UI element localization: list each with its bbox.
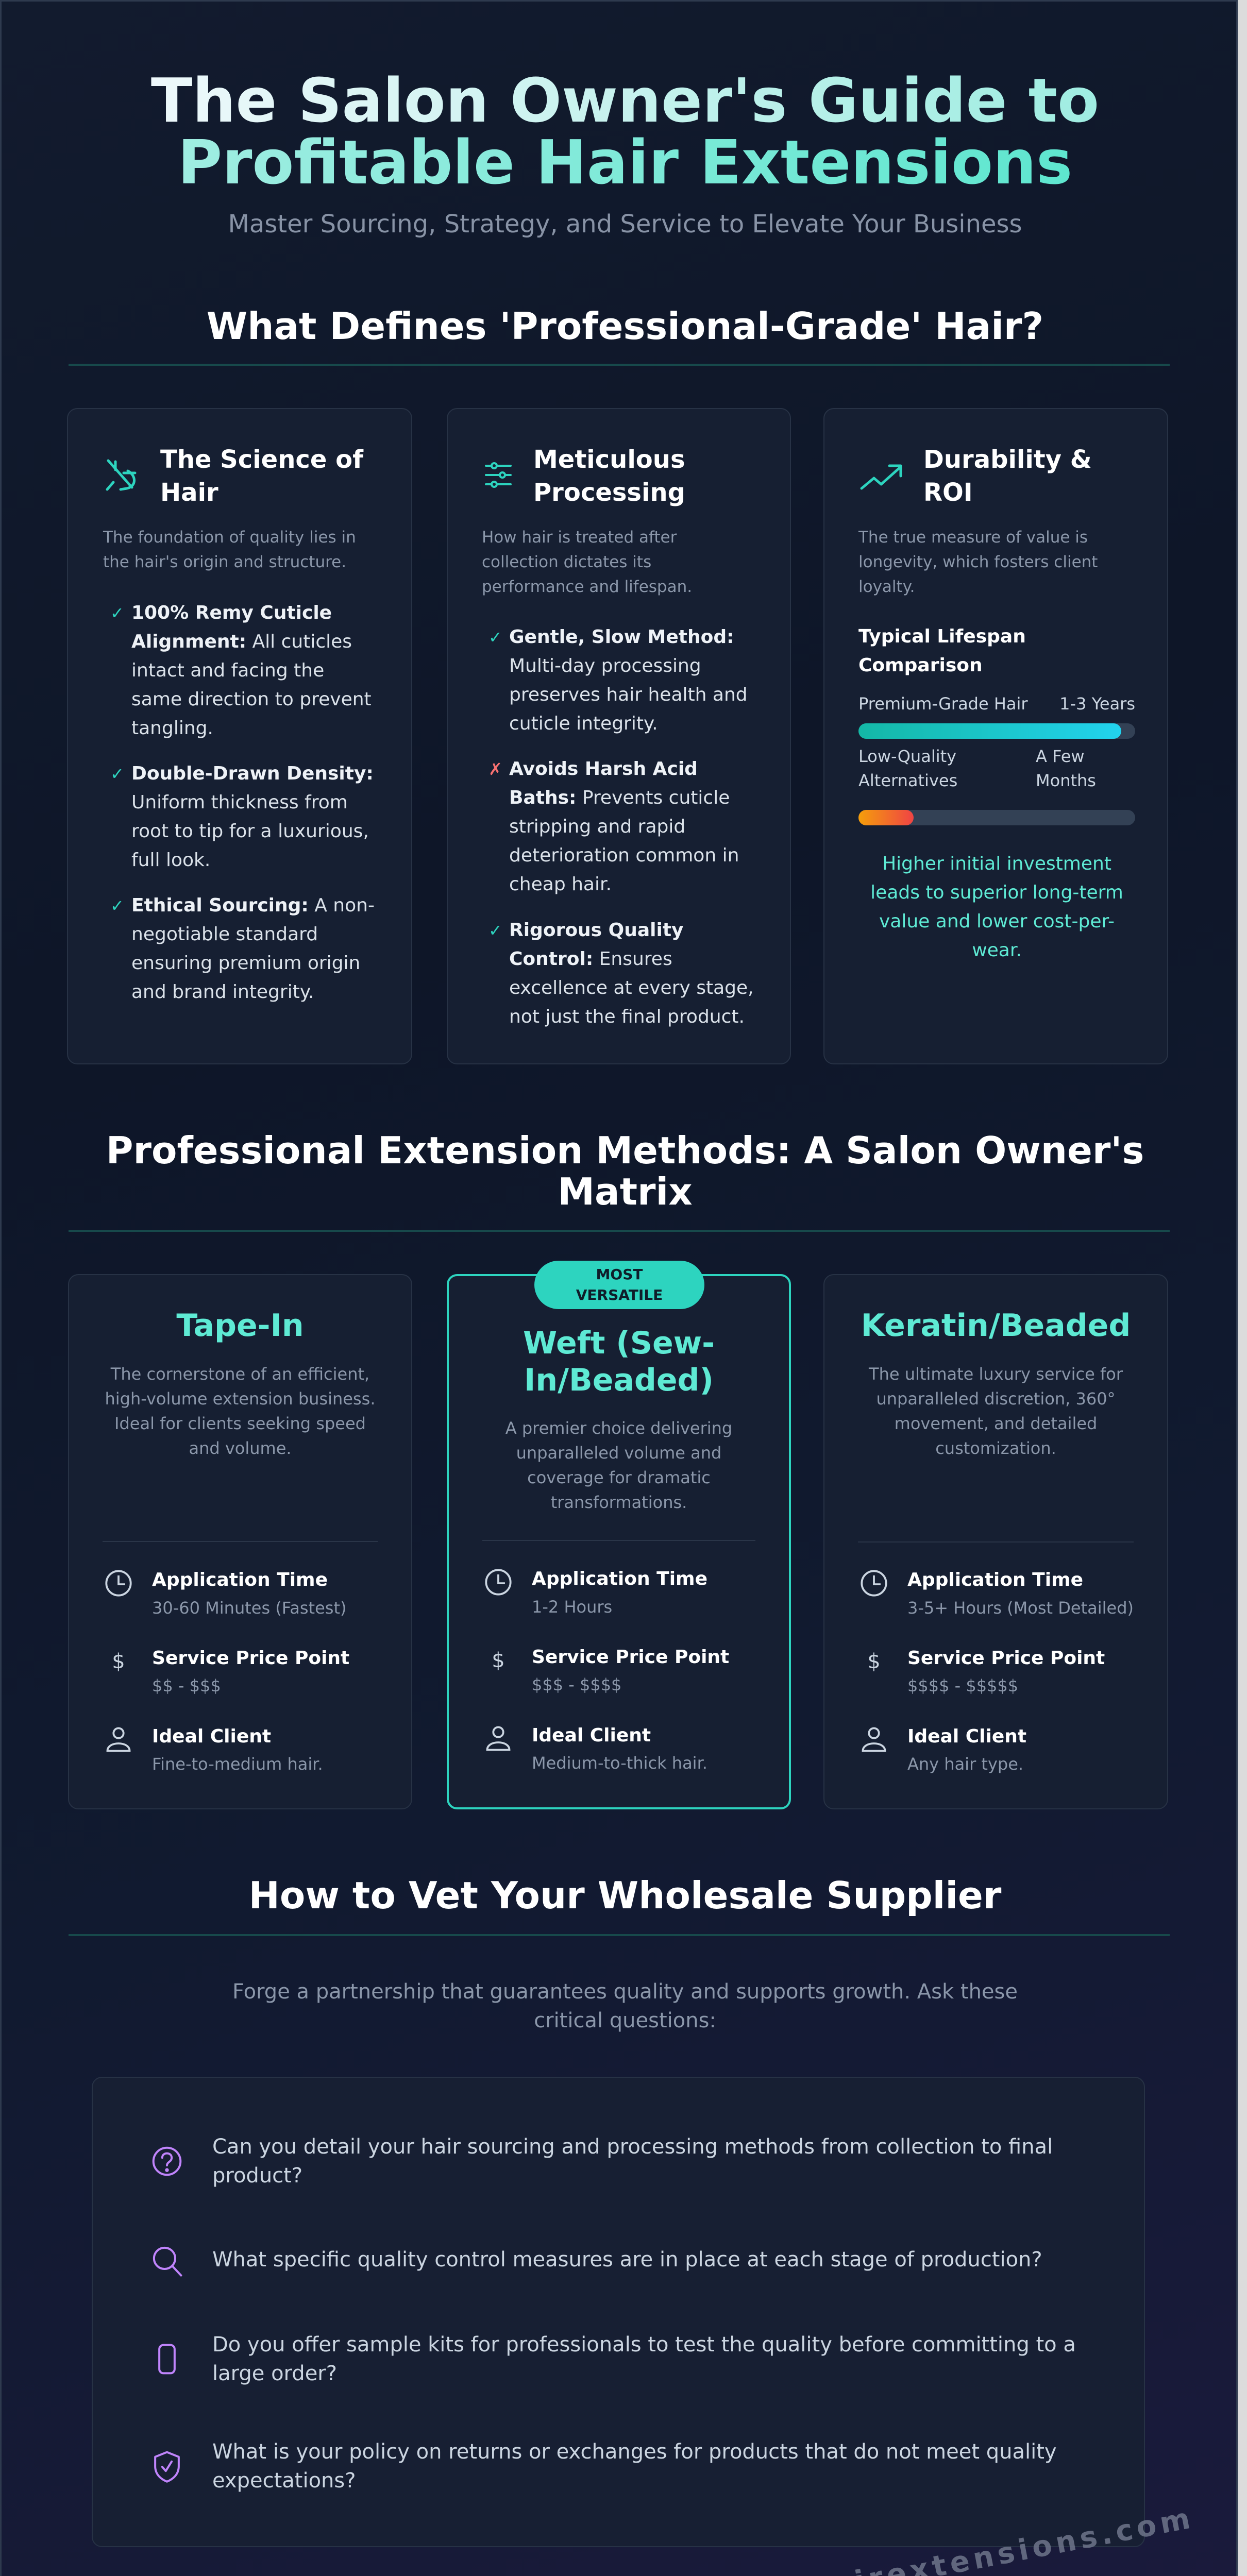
method description: The ultimate luxury service for: [869, 1364, 1123, 1384]
question 1: product?: [212, 2164, 302, 2188]
bullet: quality control: excellence at every stage,: [509, 977, 754, 998]
bullet: quality control: Control: Ensures: [509, 948, 672, 970]
title: Profitable Hair Extensions: [178, 127, 1072, 198]
bullet: acid baths: Baths: Prevents cuticle: [509, 787, 730, 808]
description: [482, 528, 692, 596]
row: application time: [105, 1569, 346, 1618]
description: [858, 528, 1098, 596]
heading: vet supplier: How to Vet Your Wholesale Supplier: [249, 1874, 1001, 1917]
row: ideal client: Any hair type.: [907, 1754, 1023, 1774]
row: ideal client: Ideal Client: [907, 1726, 1026, 1747]
bullet: quality control: ✓: [488, 921, 502, 940]
icon: sample: [150, 2343, 183, 2376]
method description: coverage for dramatic: [527, 1468, 711, 1487]
bullet: density: ✓: [110, 764, 124, 784]
icon: shield: [150, 2450, 183, 2483]
description: The foundation of quality lies in: [103, 528, 356, 547]
bar: premium: [858, 723, 1135, 739]
card title: Hair: [160, 478, 218, 507]
bullet: remy: [110, 602, 372, 739]
bar chart: lifespan comparison: [858, 694, 1135, 825]
icon: question: [150, 2145, 183, 2178]
bullet: acid baths: stripping and rapid: [509, 816, 685, 837]
card title: [533, 445, 685, 507]
row: price: $: [867, 1650, 881, 1673]
heading: extension methods: Matrix: [558, 1170, 693, 1213]
bullet: remy: 100% Remy Cuticle: [131, 602, 332, 623]
row: price: [824, 1642, 1167, 1699]
method title: Keratin/Beaded: [861, 1308, 1131, 1344]
method description: high-volume extension business.: [105, 1389, 375, 1409]
description: loyalty.: [858, 578, 915, 596]
bullet: ethical: Ethical Sourcing: A non-: [131, 895, 375, 916]
badge: most versatile: [534, 1261, 704, 1309]
badge: most versatile: VERSATILE: [576, 1286, 663, 1303]
label: premium: Premium-Grade Hair: [858, 694, 1028, 714]
panel: supplier questions: [92, 2077, 1145, 2547]
label: low quality: Low-Quality: [858, 747, 956, 766]
bullet: gentle: Multi-day processing: [509, 655, 701, 676]
panel: durability & ROI: [823, 408, 1168, 1064]
method title: [523, 1325, 715, 1398]
question 2: What specific quality control measures are in place at each stage of production?: [212, 2248, 1042, 2272]
bullet: gentle: [488, 626, 748, 734]
callout: investment: [870, 853, 1123, 961]
question 3: large order?: [212, 2362, 337, 2385]
card title: Durability &: [923, 445, 1092, 474]
row: application time: [485, 1568, 707, 1617]
badge: most versatile: MOST: [596, 1266, 643, 1283]
bullet: quality control: [488, 920, 754, 1027]
question 1: [93, 2132, 1146, 2190]
panel: tape-in: [68, 1274, 412, 1809]
method description: [824, 1362, 1167, 1461]
bullet: acid baths: [488, 758, 739, 895]
bullet: acid baths: Avoids Harsh Acid: [509, 758, 698, 779]
row: ideal client: Fine-to-medium hair.: [152, 1754, 323, 1774]
description: the hair's origin and structure.: [103, 553, 346, 571]
row: application time: Application Time: [907, 1569, 1083, 1590]
card title: Processing: [533, 478, 685, 507]
intro text: Forge a partnership that guarantees quality and supports growth. Ask these: [232, 1980, 1018, 2004]
row: price: $$$ - $$$$: [532, 1675, 621, 1694]
callout: investment: value and lower cost-per-: [879, 911, 1115, 932]
card title: Meticulous: [533, 445, 685, 474]
row: price: Service Price Point: [152, 1648, 349, 1669]
heading: professional-grade: What Defines 'Professional-Grade' Hair?: [207, 304, 1043, 348]
label: low quality: [858, 747, 957, 790]
row: price: $$ - $$$: [152, 1676, 221, 1696]
bullet: ethical: ✓: [110, 896, 124, 916]
method title: In/Beaded): [524, 1362, 714, 1398]
row: application time: 3-5+ Hours (Most Detailed): [907, 1598, 1134, 1618]
bullet: remy: ✓: [110, 603, 124, 623]
icon: sliders: [485, 462, 512, 488]
subheading: lifespan: Typical Lifespan: [858, 626, 1026, 647]
panel: weft: [447, 1274, 791, 1809]
title: [151, 65, 1099, 198]
bullet: remy: intact and facing the: [131, 660, 324, 681]
question 4: expectations?: [212, 2469, 356, 2493]
question 3: Do you offer sample kits for professionals to test the quality before committing to a: [212, 2333, 1076, 2357]
bar chart: lifespan comparison: 1-3 Years: [1059, 694, 1135, 714]
bullet: remy: tangling.: [131, 718, 213, 739]
subtitle: Master Sourcing, Strategy, and Service to Elevate Your Business: [228, 210, 1022, 239]
bullet: density: Uniform thickness from: [131, 792, 348, 813]
method description: customization.: [935, 1438, 1056, 1458]
bullet: density: Double-Drawn Density:: [131, 763, 374, 784]
description: The true measure of value is: [858, 528, 1088, 547]
bullet: density: [110, 763, 374, 871]
bullet: density: root to tip for a luxurious,: [131, 821, 369, 842]
title: The Salon Owner's Guide to: [151, 65, 1099, 136]
row: application time: Application Time: [532, 1568, 707, 1589]
bullet: ethical: and brand integrity.: [131, 981, 314, 1003]
bullet: remy: same direction to prevent: [131, 689, 372, 710]
bullet: acid baths: cheap hair.: [509, 874, 612, 895]
intro text: critical questions:: [534, 2009, 716, 2032]
callout: investment: wear.: [972, 940, 1022, 961]
method description: Ideal for clients seeking speed: [114, 1414, 366, 1433]
row: price: Service Price Point: [532, 1647, 729, 1668]
question 1: Can you detail your hair sourcing and processing methods from collection to final: [212, 2135, 1053, 2159]
row: price: [112, 1648, 349, 1696]
row: ideal client: Medium-to-thick hair.: [532, 1753, 707, 1773]
method description: and volume.: [189, 1438, 292, 1458]
bullet: density: full look.: [131, 850, 210, 871]
callout: investment: Higher initial investment: [882, 853, 1111, 874]
method description: A premier choice delivering: [505, 1418, 732, 1438]
question 3: [93, 2330, 1146, 2388]
bar chart: lifespan comparison: Months: [1036, 771, 1096, 790]
bar chart: lifespan comparison: A Few: [1036, 747, 1085, 766]
bullet: gentle: Gentle, Slow Method:: [509, 626, 734, 648]
question 2: [93, 2245, 1146, 2278]
question 4: What is your policy on returns or exchanges for products that do not meet quality: [212, 2440, 1057, 2464]
bullet: gentle: preserves hair health and: [509, 684, 748, 705]
row: price: [449, 1641, 789, 1698]
method description: unparalleled discretion, 360°: [876, 1389, 1116, 1409]
icon: magnifier: [150, 2244, 183, 2277]
bullet: ethical: negotiable standard: [131, 924, 318, 945]
description: collection dictates its: [482, 553, 651, 571]
bullet: remy: Alignment: All cuticles: [131, 631, 352, 652]
row: price: Service Price Point: [907, 1648, 1105, 1669]
row: ideal client: [106, 1726, 323, 1774]
row: application time: 1-2 Hours: [532, 1597, 612, 1617]
description: longevity, which fosters client: [858, 553, 1098, 571]
method description: [105, 1364, 375, 1458]
bullet: acid baths: ✗: [488, 759, 502, 779]
intro text: [2, 1977, 1247, 2035]
bar: low quality: [858, 810, 1135, 825]
description: [103, 528, 356, 571]
subheading: lifespan: Comparison: [858, 655, 983, 676]
row: ideal client: [824, 1720, 1167, 1777]
icon: trending up: [861, 465, 902, 489]
bullet: quality control: Rigorous Quality: [509, 920, 684, 941]
card title: [160, 445, 364, 507]
row: application time: 30-60 Minutes (Fastest): [152, 1598, 346, 1618]
heading: extension methods: [106, 1129, 1144, 1213]
method description: transformations.: [551, 1493, 687, 1512]
method description: movement, and detailed: [895, 1414, 1097, 1433]
method description: unparalleled volume and: [516, 1443, 721, 1463]
bullet: gentle: cuticle integrity.: [509, 713, 658, 734]
panel: meticulous processing: [447, 408, 791, 1064]
method description: [505, 1418, 732, 1512]
icon: dna/strand: [106, 460, 136, 490]
panel: science of hair: [67, 408, 412, 1064]
bullet: acid baths: deterioration common in: [509, 845, 739, 866]
description: performance and lifespan.: [482, 578, 692, 596]
row: ideal client: Ideal Client: [152, 1726, 271, 1747]
row: ideal client: Ideal Client: [532, 1725, 651, 1746]
method title: Weft (Sew-: [523, 1325, 715, 1361]
description: How hair is treated after: [482, 528, 677, 547]
callout: investment: leads to superior long-term: [870, 882, 1123, 903]
heading: extension methods: Professional Extension Methods: A Salon Owner's: [106, 1129, 1144, 1172]
bullet: ethical: [110, 895, 375, 1003]
row: application time: Application Time: [152, 1569, 328, 1590]
method description: The cornerstone of an efficient,: [111, 1364, 369, 1384]
row: ideal client: [449, 1719, 789, 1776]
question 4: [93, 2437, 1146, 2495]
row: application time: [824, 1564, 1167, 1620]
row: price: $$$$ - $$$$$: [907, 1676, 1018, 1696]
card title: [923, 445, 1092, 507]
bullet: ethical: ensuring premium origin: [131, 953, 360, 974]
card title: The Science of: [160, 445, 363, 474]
row: price: $: [492, 1649, 505, 1672]
label: low quality: Alternatives: [858, 771, 957, 790]
row: price: $: [112, 1650, 125, 1673]
bullet: gentle: ✓: [488, 628, 502, 647]
panel: keratin/beaded: [823, 1274, 1168, 1809]
method title: Tape-In: [176, 1308, 304, 1344]
card title: ROI: [923, 478, 973, 507]
bullet: quality control: not just the final product.: [509, 1006, 745, 1027]
subheading: lifespan: [858, 626, 1026, 676]
